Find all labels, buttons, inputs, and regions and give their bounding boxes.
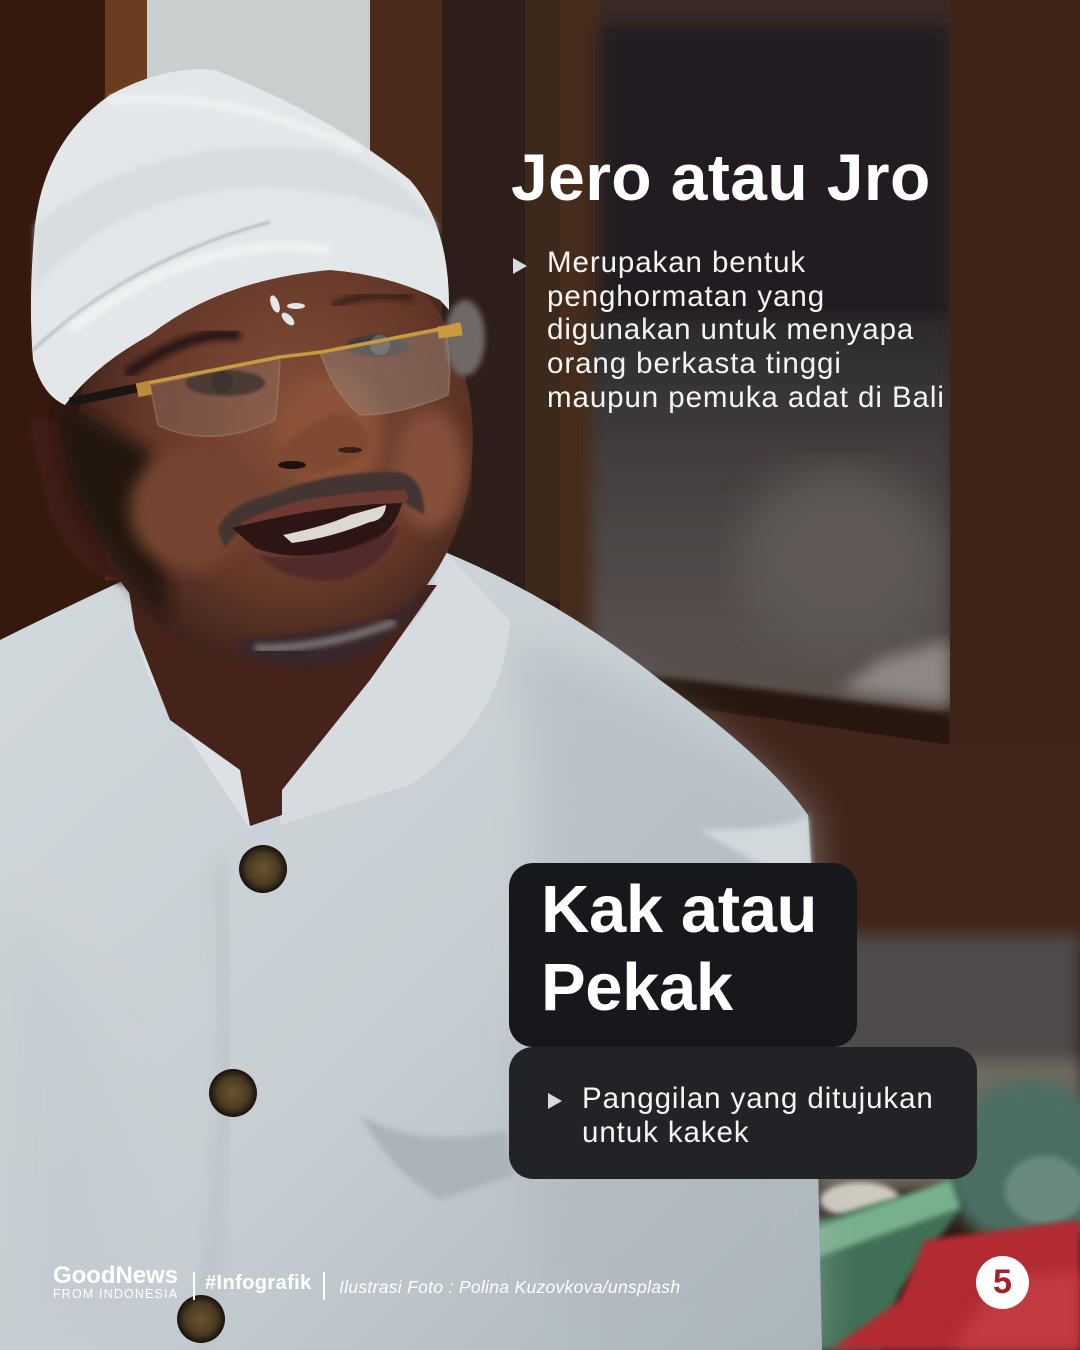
hashtag: #Infografik	[205, 1272, 312, 1294]
mouth and teeth	[232, 490, 408, 581]
eyeglasses	[70, 323, 463, 436]
grey goatee	[240, 582, 430, 667]
ear hair grey	[445, 300, 485, 376]
description text: untuk kakek	[582, 1116, 750, 1149]
heading text: Kak atau	[541, 872, 817, 947]
description text	[547, 246, 945, 414]
basket and bowl at lower right	[795, 1080, 1080, 1350]
heading text	[541, 872, 817, 1025]
description text	[582, 1082, 934, 1149]
ear and hair behind face	[28, 417, 125, 585]
description text: maupun pemuka adat di Bali	[547, 381, 945, 414]
bullet marker	[548, 1093, 562, 1109]
text block: Jero description	[513, 246, 945, 414]
moustache	[218, 472, 424, 548]
description text: orang berkasta tinggi	[547, 347, 842, 380]
description text: digunakan untuk menyapa	[547, 313, 914, 346]
rice grains on forehead	[268, 294, 305, 327]
eyebrows	[130, 295, 410, 372]
bullet marker	[513, 258, 527, 274]
logo: GoodNews from Indonesia: GoodNews	[53, 1262, 178, 1289]
description text: penghormatan yang	[547, 280, 825, 313]
nose	[270, 413, 372, 473]
footer credit bar	[53, 1262, 680, 1301]
white head wrap (udeng)	[31, 69, 449, 405]
heading: Jero atau Jro: Jero atau Jro	[511, 140, 931, 214]
neck	[128, 585, 437, 826]
white shirt	[0, 552, 822, 1350]
description text: Panggilan yang ditujukan	[582, 1082, 934, 1115]
face	[60, 214, 473, 666]
description text: Merupakan bentuk	[547, 246, 806, 279]
page number badge: 5	[993, 1263, 1012, 1301]
eyes	[185, 335, 410, 396]
logo: GoodNews from Indonesia	[53, 1262, 178, 1301]
right collar	[280, 552, 510, 825]
panel: Kak atau Pekak description	[509, 1047, 977, 1179]
heading text: Pekak	[541, 950, 733, 1025]
shirt buttons	[177, 845, 287, 1343]
logo: GoodNews from Indonesia: FROM INDONESIA	[53, 1287, 178, 1301]
panel: Kak atau Pekak heading	[509, 863, 857, 1047]
photo credit: Ilustrasi Foto : Polina Kuzovkova/unsplash	[339, 1277, 680, 1297]
page number badge	[976, 1256, 1029, 1309]
